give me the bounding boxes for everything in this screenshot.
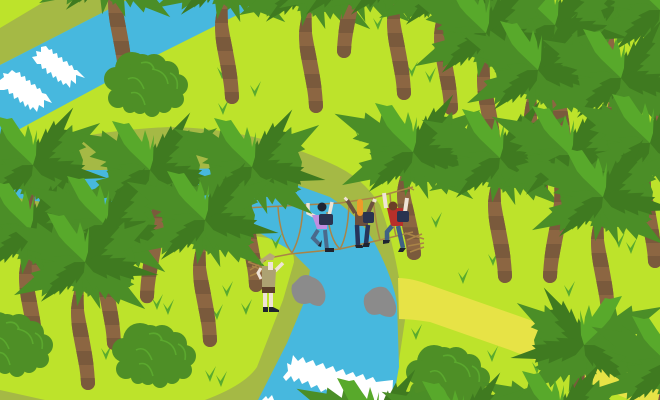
palm front centre <box>118 156 282 357</box>
palm right top 2 <box>573 0 660 145</box>
rock left <box>291 275 325 306</box>
rope wraps left <box>248 260 268 276</box>
rope bridge <box>245 187 424 276</box>
palm beside bridge <box>326 88 490 268</box>
climber: orange hair <box>345 198 375 248</box>
climber: purple shirt <box>308 202 334 252</box>
palm bottom crown 1 <box>473 356 637 400</box>
palm centre top <box>399 0 563 168</box>
palm bottom crown 3 <box>373 366 537 400</box>
palm bottom corner <box>583 301 660 400</box>
river bend bank <box>0 127 405 400</box>
palm back 6 <box>363 0 527 125</box>
climber: red shirt <box>383 193 409 252</box>
palm left 4 <box>18 161 182 360</box>
palm right 2 <box>534 14 660 213</box>
palm back 1 <box>23 0 187 90</box>
palm right edge <box>563 79 660 278</box>
palm leaning <box>483 91 647 293</box>
palm centre 2 <box>451 6 615 207</box>
palm right top 3 <box>468 0 632 160</box>
palm bottom right <box>507 281 660 400</box>
lower river <box>0 168 399 400</box>
palm crown at bridge <box>165 103 329 228</box>
rock right <box>364 287 396 317</box>
rope wraps right <box>405 187 424 252</box>
palm bottom crown 2 <box>288 363 452 400</box>
palm left 2 <box>63 106 227 314</box>
palm left 1 <box>0 101 110 300</box>
palm mid right <box>413 94 577 293</box>
bush top <box>104 52 188 117</box>
rapids: upper 2 <box>0 70 52 112</box>
palm right top 1 <box>528 0 660 130</box>
rapids: lower <box>283 355 393 400</box>
palm back 4 <box>263 0 427 68</box>
rapids: small <box>262 395 274 400</box>
upper river <box>0 0 270 140</box>
top rope <box>245 187 413 208</box>
palm back 5 <box>308 0 472 110</box>
palm front left <box>0 198 162 400</box>
suspender ropes <box>278 194 396 253</box>
bush left <box>0 312 53 377</box>
trunk of bridge palm <box>236 167 266 302</box>
palm back 3 <box>223 0 387 123</box>
grass tufts <box>101 14 637 387</box>
yellow path <box>398 278 660 400</box>
lower rope <box>248 232 413 262</box>
palm back 2 <box>138 0 302 114</box>
palm right lower <box>516 133 660 330</box>
bush centre <box>112 323 196 388</box>
bush lower right <box>406 345 490 400</box>
explorer <box>258 253 283 312</box>
upper river bank <box>0 0 127 65</box>
bottom left bank <box>0 390 45 400</box>
palm left 3 <box>0 166 107 365</box>
rapids: upper 1 <box>32 46 85 88</box>
